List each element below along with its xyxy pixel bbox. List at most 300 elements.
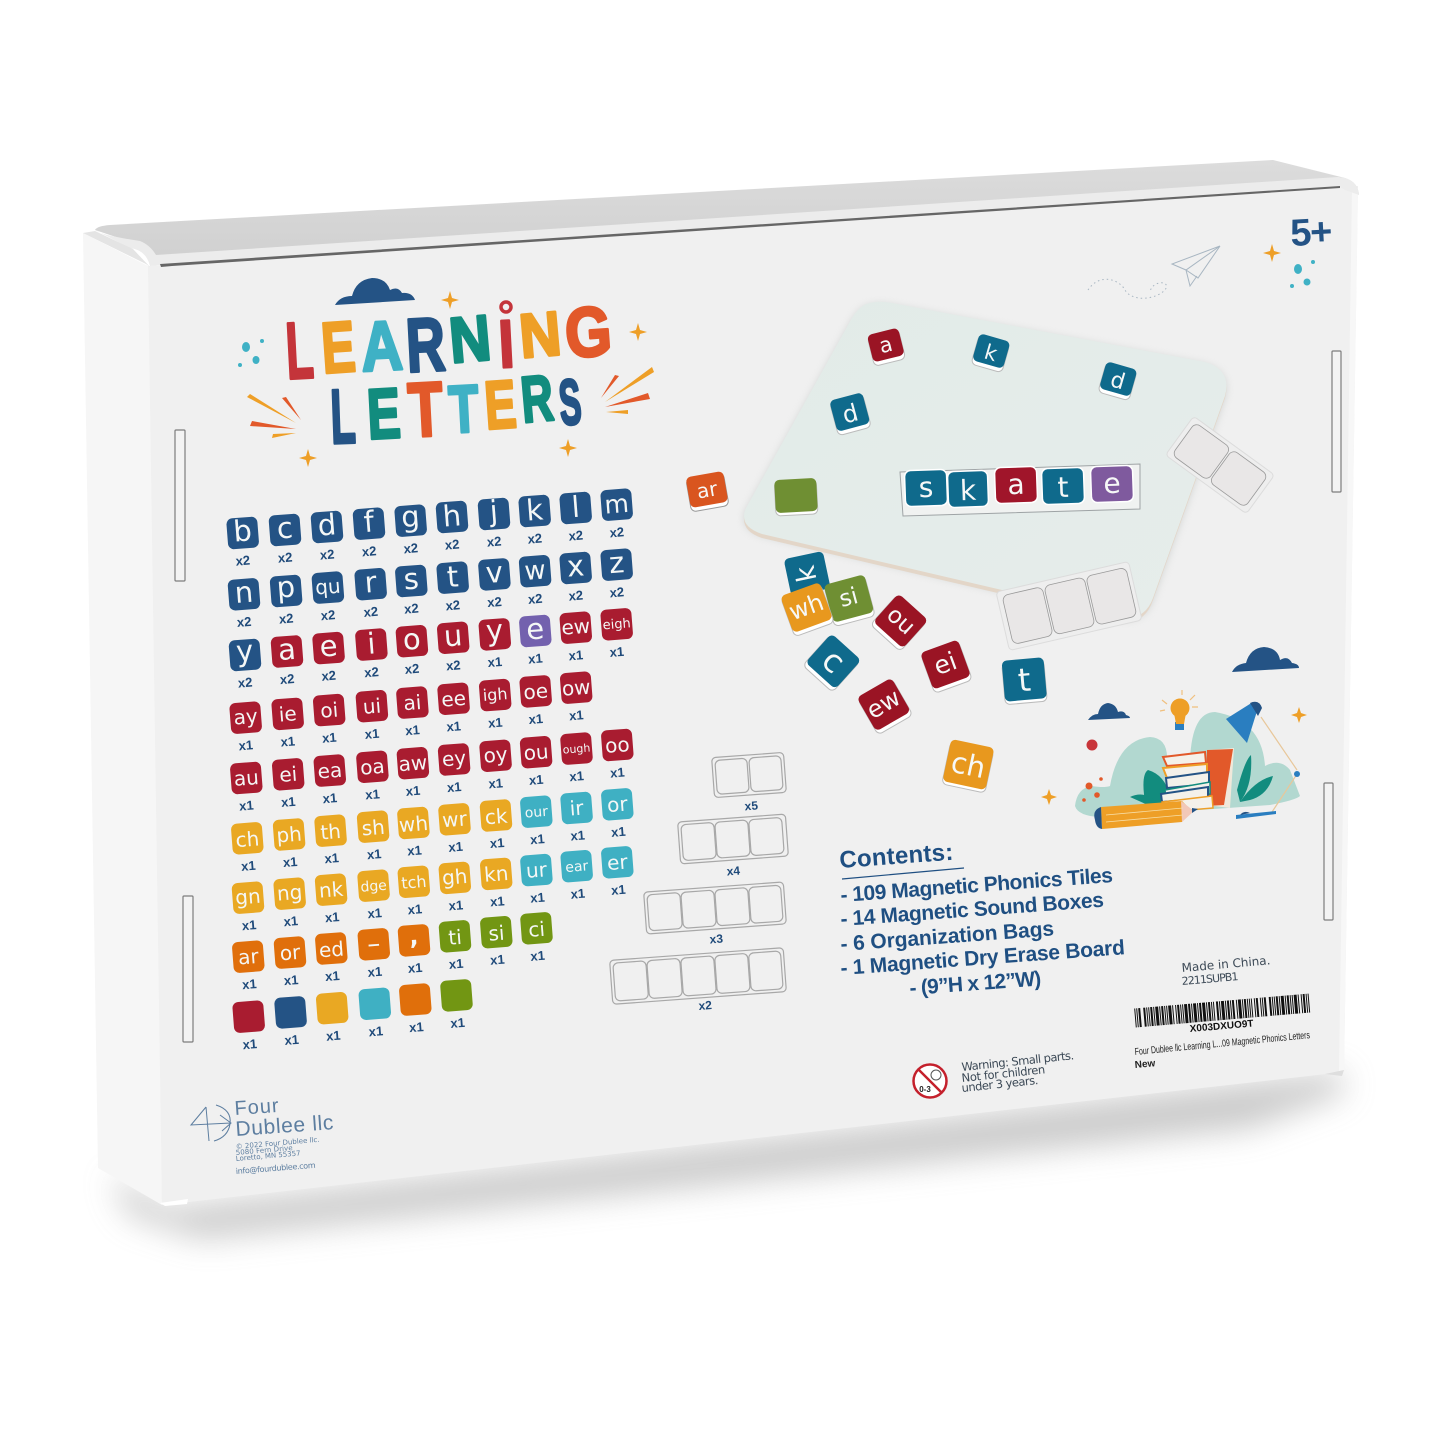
tile: er [601,846,635,898]
whiteboard [744,302,1275,651]
tile: wr: x1 [448,839,463,855]
tile: aw: aw [398,750,428,776]
sound box x2 [610,948,787,1019]
tile: nk: x1 [324,909,340,925]
logo mark [191,1105,231,1141]
lamp [1226,702,1300,819]
tile: ay: x1 [238,737,254,753]
tile: aw [396,747,431,799]
tile: igh: x1 [488,715,503,731]
tile: s: x2 [404,601,419,617]
e tile [1090,465,1134,503]
tile: apostrophe: , [408,922,419,951]
tile: gn: x1 [241,917,257,933]
tile: ed: ed [318,937,345,962]
contents list: - 1 Magnetic Dry Erase Board [840,936,1126,980]
tile: si: x1 [490,952,505,968]
tile: sh: sh [361,815,386,841]
tile: ed [315,932,349,985]
tile ei [920,639,972,693]
age label 5+: 5+ [1289,211,1333,255]
tile: f: x2 [361,543,377,559]
tile: k [518,492,553,547]
board tile green [774,478,818,516]
tile t [1002,657,1047,705]
blank red: x1 [242,1036,258,1052]
blank green [440,979,475,1031]
tile: kn [480,857,514,910]
underline [842,868,964,879]
tile k: k [790,563,823,585]
sound box x3: x3 [709,931,724,946]
sound box x4 [678,814,790,882]
word: LEARNING: I [497,306,516,382]
tile: qu: x2 [320,607,336,623]
tile: ti: ti [447,925,463,950]
tile: si: si [487,921,505,946]
tile: ai: x1 [405,722,420,738]
board tile a [867,328,906,366]
tile: ch: x1 [241,858,256,874]
tile: ui [355,690,390,742]
tile: qu: qu [314,574,341,600]
tile grid [226,488,635,1053]
tile: oa: oa [359,754,386,780]
contents list: - 6 Organization Bags [840,917,1055,956]
bottom notch [160,1199,188,1206]
barcode [1135,1003,1309,1018]
blank cyan: x1 [368,1023,384,1039]
tile: th: th [320,819,342,844]
barcode label [1134,1003,1310,1071]
blank yellow [316,992,350,1044]
slot: right lower [1324,783,1333,920]
tile: er: x1 [611,882,626,898]
tile: ir: ir [569,795,585,820]
tile: u [436,618,471,674]
tile: k: k [525,492,545,528]
tile: e: e [318,628,339,664]
tile: b: x2 [235,553,251,569]
box top lip [95,177,1359,266]
tile: wh: wh [398,811,429,837]
warning icon: 0-3 [919,1085,931,1094]
tile: m: x2 [609,524,625,540]
blank green: x1 [450,1015,465,1031]
slot: left upper [175,430,185,581]
k tile [947,470,989,508]
tile: w: x2 [527,591,543,607]
box left side [83,233,162,1205]
board tile a: a [877,332,895,358]
tile: ei: ei [278,762,298,787]
box front face [148,186,1358,1205]
word: LETTERS: E [365,373,402,454]
right bottom notch [1325,1070,1344,1076]
tile: ay: ay [233,704,259,730]
board edge [744,304,1226,622]
company logo and address: Dublee llc [235,1111,334,1141]
tile: wr: wr [441,806,468,832]
tile: w [518,555,553,607]
word: LETTERS: T [447,372,481,448]
tile: d [310,507,345,563]
tile ar [686,471,729,512]
word: LEARNING: N [446,301,494,376]
tile: x [559,548,594,604]
word: LEARNING: G [562,291,614,373]
condition: New [1134,1058,1156,1071]
contents block [838,839,1126,1000]
tile: ey: ey [441,746,467,771]
tile: our: our [524,804,549,822]
tile: ai [396,686,431,739]
board tile k: k [982,340,1001,366]
tile: oe: x1 [528,711,544,727]
tile: l [559,489,594,544]
tile: ay [229,701,264,754]
tile: ir: x1 [570,827,586,844]
tile: ow: ow [561,675,591,701]
tile: oa [356,750,391,803]
tile si: si [837,583,861,613]
word: LETTERS: R [518,361,556,436]
cloud [335,278,415,305]
address: 5080 Fern Drive [235,1144,293,1157]
word: LETTERS: T [406,367,445,454]
tile: ough: ough [562,742,591,757]
tile: ar [232,940,266,993]
tile: igh [479,678,513,731]
tile: ie: ie [278,701,298,727]
board tile d: d [839,398,861,429]
tile: ti [438,920,473,972]
tile: ti: x1 [448,956,464,972]
tile row 1 [226,488,635,569]
tile c [803,633,861,692]
tile: p: x2 [278,611,294,627]
tile: z: z [608,545,625,580]
tile: ur: x1 [530,890,545,906]
tile: oy [479,739,514,792]
tile: ea: ea [317,758,343,784]
dotted flight path [1088,279,1166,298]
tile: ph: x1 [282,854,298,870]
tile: ei: x1 [281,794,296,810]
tile ew: ew [862,683,905,725]
contents list: - 109 Magnetic Phonics Tiles [840,864,1114,907]
tile: l: l [570,490,581,524]
tile: gh [438,861,473,914]
tile ou: ou [881,602,920,640]
tile: j: x2 [486,534,502,550]
barcode code: X003DXUO9T [1189,1018,1254,1035]
tile wh [780,582,834,637]
word: LEARNING: R [404,301,447,388]
tile: ck: x1 [489,835,505,851]
tile: dge: dge [360,878,387,896]
cloud small [1088,703,1130,720]
tile: h: x2 [444,537,460,553]
sound boxes diagram [610,752,790,1019]
leaves [1130,755,1273,810]
tile: ie [271,697,306,750]
word on board: skate [900,464,1140,516]
age sparkles [1263,244,1315,288]
tile ar: ar [695,476,720,504]
tile: z: x2 [609,584,625,600]
address: © 2022 Four Dublee llc. [235,1136,320,1151]
tile: sh [356,810,391,863]
tile: x: x2 [568,588,584,604]
tile: ou: ou [523,739,549,765]
tile: ough [560,732,595,785]
tile: k: x2 [527,531,543,547]
tile: r: r [363,565,378,600]
mint hills [1075,712,1300,817]
blank cyan [358,987,393,1040]
tile: ir [560,791,595,844]
tile: j: j [487,494,499,528]
tile: i: i [366,626,377,661]
board tile d [829,392,871,436]
word: LETTERS [329,361,584,461]
word: LETTERS: S [556,365,584,439]
tile: oo: x1 [610,765,625,781]
tile: oy: oy [483,742,509,768]
address [235,1136,320,1163]
tile ei: ei [930,646,961,681]
tile: ui: ui [362,694,382,719]
skate frame [900,464,1140,516]
tile: u: x2 [446,657,461,673]
bulb [1160,690,1198,730]
tile: ew: x1 [568,647,584,663]
tile: ew [559,611,594,664]
tile: w: w [523,555,547,587]
tile: au: x1 [239,798,254,814]
tile: nk [314,873,349,926]
tile: ey: x1 [446,779,462,795]
tile: ci [520,912,555,964]
tile: ng [273,877,308,930]
tile: kn: x1 [490,893,505,909]
a tile [994,466,1038,504]
tile: gh: gh [441,864,468,890]
contents list: - 14 Magnetic Sound Boxes [840,889,1105,931]
tile: m: m [603,489,630,520]
tile: au: au [233,765,260,791]
tile: ed: x1 [325,968,340,984]
tile: oi [313,693,347,746]
tile c: c [814,641,853,681]
tile: ou: x1 [528,772,544,788]
t tile: t [1057,471,1069,504]
tile: wh: x1 [407,842,422,859]
tile: tch [397,865,432,918]
tile: ou [519,736,554,788]
made in china: 2211SUPB1 [1181,970,1239,988]
tile: n: x2 [236,614,252,630]
sound box x3 [644,882,788,951]
tile: dge [357,869,392,922]
paper plane [1088,246,1220,298]
tile: ph [272,818,307,871]
orange book [1206,748,1234,808]
blank orange: x1 [409,1019,424,1035]
tile: e: e [525,611,545,647]
tile: o [395,621,430,677]
tile: f [352,504,387,560]
tile: or: x1 [283,972,299,988]
tile: ci: x1 [530,948,545,964]
tile: v: x2 [487,594,502,610]
tile ch: ch [948,745,989,785]
tile: or: or [279,940,302,965]
tile: qu [311,571,346,624]
board surface [744,302,1226,618]
tile row 3 [228,608,635,691]
tile t: t [1016,661,1032,699]
tile: b: b [232,513,253,549]
tile: dge: x1 [367,905,383,921]
tile: ear [560,850,595,902]
tile: wh [397,806,432,859]
tile: wr [438,803,473,855]
tile: tch: tch [401,872,427,893]
tile: ey [437,743,472,796]
tile: h: h [441,498,462,534]
address: Loretto, MN 55357 [235,1149,301,1163]
board soft shadow [744,304,1226,620]
tile: e [518,611,553,667]
tile: dash: – [366,929,381,960]
tile: d: x2 [319,547,335,563]
tile: y [228,633,263,691]
board tile d [1098,361,1138,401]
tile: ow [560,671,594,724]
sound box x5: x5 [744,798,759,813]
tile: c [268,510,303,566]
word: LEARNING: A [359,306,404,386]
tile: ew: ew [561,614,591,640]
tile row 9: blank tiles [232,979,475,1053]
scattered tiles [686,471,1047,793]
tile: eigh [600,608,635,660]
tile: s: s [402,561,420,597]
red dots [1082,777,1103,802]
tile: y: x1 [487,654,503,670]
tile: our [520,795,554,848]
tile: t: x2 [445,597,461,613]
contents list: - (9”H x 12”W) [909,967,1042,1000]
pencil [1094,801,1198,829]
tile: eigh: eigh [602,616,631,633]
tile: ar: x1 [242,976,257,992]
tile: t [436,559,471,614]
box right strip [1339,188,1358,1073]
tile: d: d [316,507,337,543]
tile: r [354,564,389,620]
warning icon [914,1064,946,1098]
tile: ough: x1 [569,768,584,784]
tile: j [477,493,512,550]
tile wh: wh [785,588,828,626]
tile: ei [272,758,306,810]
tile: ear: x1 [570,886,586,902]
tile row 4 [229,671,594,754]
tile k [784,551,831,596]
tile: e: x2 [321,668,337,684]
tile: ck: ck [484,804,509,829]
blank yellow: x1 [326,1028,341,1044]
tile: c: c [276,510,294,546]
made in china: Made in China. [1181,953,1271,975]
tile si [824,574,875,627]
tile: v [477,554,513,610]
blank red [232,1000,267,1053]
tile: ea [313,754,348,807]
k tile: k [959,474,978,507]
tile: oa: x1 [365,786,380,802]
tile: ear: ear [565,858,589,876]
tile: er: er [606,849,629,875]
tile: or: or [606,791,629,817]
tile: m [600,488,635,541]
tile row 2 [227,545,635,630]
a tile: a [1007,468,1025,501]
tile: y: y [235,633,255,669]
tile: r: x2 [363,604,379,620]
tile: x: x [566,548,585,584]
tile: kn: kn [483,861,509,887]
tile: ai: ai [403,690,422,715]
tile: b [226,513,261,569]
tile ch [942,739,994,793]
tile: ur [520,853,555,906]
tile: a: x2 [279,671,295,687]
word: LEARNING: E [319,307,358,389]
board tile k [971,333,1011,373]
sound box x4: x4 [726,864,741,879]
tile: oi: oi [319,697,339,723]
tile: c: x2 [277,550,293,566]
tile: ng: x1 [283,913,299,929]
tile: o: x2 [404,661,420,677]
tile: ie: x1 [280,733,296,750]
company logo and address [191,1095,334,1176]
blank orange [399,983,433,1036]
sparks left [247,394,301,438]
tile: y [478,612,513,670]
tile: ch [231,822,265,874]
tile: oo: oo [604,732,630,758]
tile: sh: x1 [366,846,382,862]
slot: left lower [183,896,193,1042]
tile: ch: ch [235,826,260,852]
tile: l: x2 [568,528,584,544]
tile: ci: ci [527,917,546,942]
warning text: under 3 years. [961,1073,1039,1095]
tile: t: t [446,559,460,594]
sound box on board right [1165,416,1275,514]
tile: gn: gn [234,884,261,910]
word: LETTERS: E [482,367,519,444]
tile: g [394,499,429,557]
tile: ur: ur [525,857,549,883]
tile: igh: igh [482,684,508,705]
tile: ea: x1 [322,790,338,806]
